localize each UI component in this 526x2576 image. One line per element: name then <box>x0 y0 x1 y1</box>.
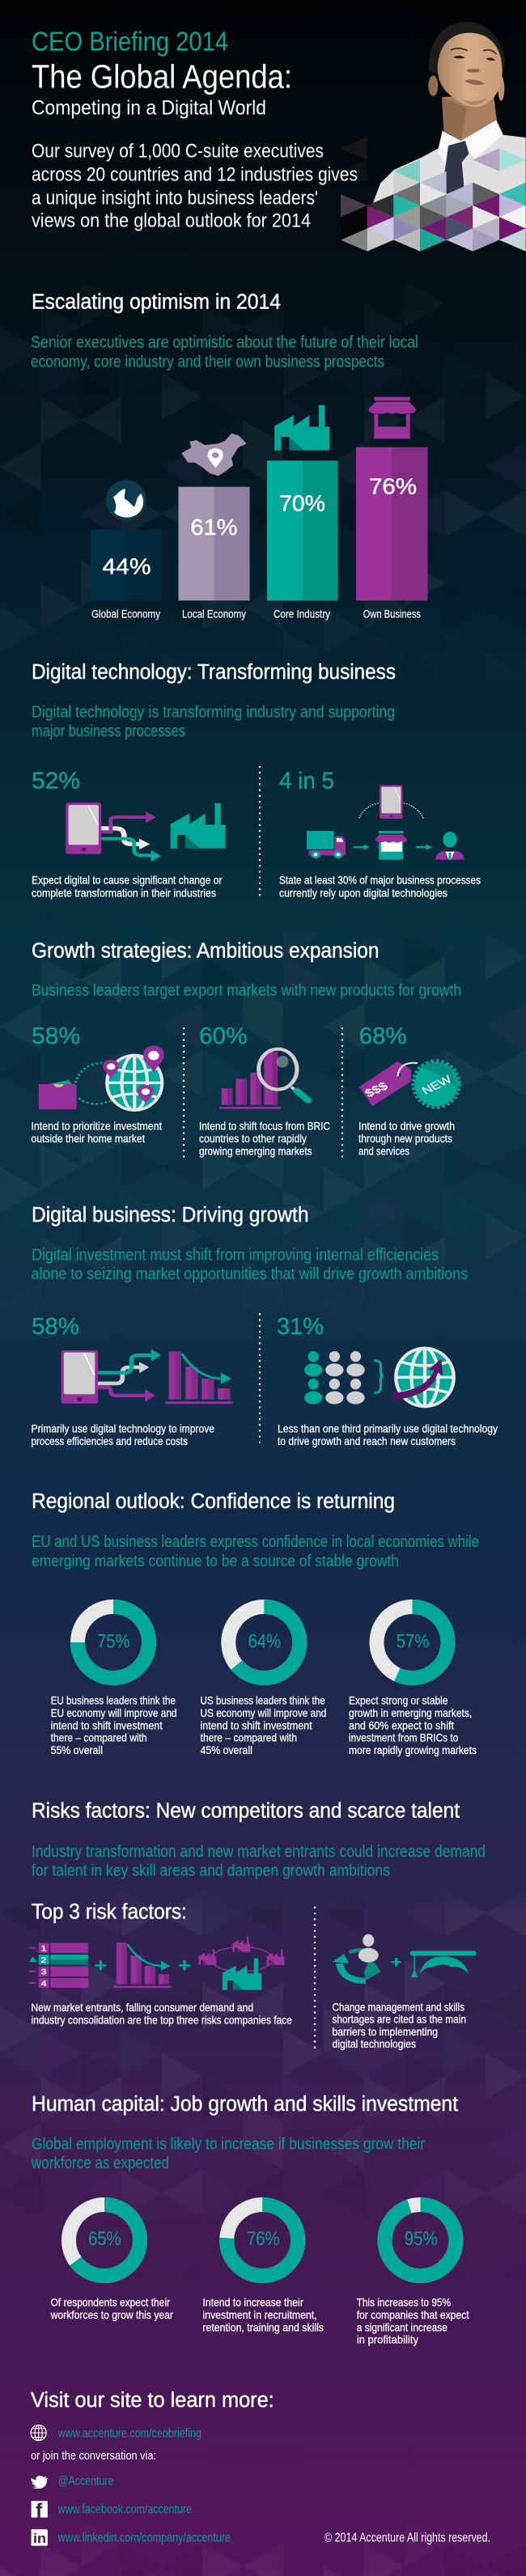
stat: 31%: 31% <box>277 1314 324 1340</box>
donut: 57%: 57% <box>397 1631 429 1653</box>
caption: barriers: Change management and skills <box>332 2001 464 2013</box>
caption: 95%: a significant increase <box>357 2321 448 2333</box>
icon: price tag and new badge: NEW <box>419 1073 456 1097</box>
bar: local economy 61% <box>178 487 249 600</box>
caption: 95%: for companies that expect <box>357 2309 469 2321</box>
caption: 58%: process efficiencies and reduce costs <box>31 1435 188 1447</box>
panel: footer links <box>31 2389 490 2546</box>
caption: 64%: intend to shift investment <box>201 1719 312 1731</box>
donut: 65%: 65% <box>88 2228 121 2250</box>
subheading <box>31 333 418 371</box>
caption: 75% <box>51 1695 176 1756</box>
caption: 57% <box>349 1695 477 1756</box>
caption: 4 in 5: currently rely upon digital technologies <box>279 887 448 899</box>
caption: barriers: digital technologies <box>332 2038 416 2050</box>
icon: ranking list: 1 <box>40 1944 46 1953</box>
intro paragraph: a unique insight into business leaders' <box>32 187 318 209</box>
panel: digital technology <box>32 661 481 899</box>
subheading: Global employment is likely to increase if businesses grow their <box>32 2136 425 2154</box>
subheading: Senior executives are optimistic about the future of their local <box>31 333 418 351</box>
mosaic triangles <box>341 137 526 252</box>
icon: phone, truck, shop and customer <box>307 785 464 860</box>
caption: 64%: there – compared with <box>201 1732 297 1744</box>
bar: global economy 44%: 44% <box>102 553 151 578</box>
caption: 4 in 5: State at least 30% of major business processes <box>279 875 481 887</box>
bar: local economy 61%: 61% <box>191 515 238 540</box>
hair <box>429 22 505 74</box>
bar icons <box>106 397 416 520</box>
donut: 75% <box>78 1607 149 1678</box>
subheading: workforce as expected <box>31 2154 169 2172</box>
icon: plus <box>392 1958 401 1967</box>
icon: price tag and new badge: $$$ <box>363 1080 391 1100</box>
caption: 76%: investment in recruitment, <box>202 2309 317 2321</box>
icon: phone with arrows to factory <box>66 803 226 862</box>
shirt <box>372 121 526 240</box>
icon: bar chart with magnifier <box>219 1049 308 1109</box>
caption: 64%: US business leaders think the <box>201 1695 325 1707</box>
caption: 76% <box>202 2297 324 2333</box>
icon: price tag and new badge <box>359 1061 460 1108</box>
heading: Human capital: Job growth and skills investment <box>32 2093 458 2116</box>
subtitle: Competing in a Digital World <box>32 97 266 120</box>
caption: 75%: intend to shift investment <box>51 1719 163 1731</box>
caption: 65%: workforces to grow this year <box>50 2309 173 2321</box>
icon: people and globe with rising arrow <box>304 1347 455 1408</box>
bar: own business 76% <box>356 447 427 600</box>
ears <box>428 75 438 96</box>
caption: 95%: This increases to 95% <box>357 2297 451 2309</box>
brows and eyes <box>451 49 496 54</box>
caption: top 3 risks: industry consolidation are the top three risks companies face <box>31 2015 292 2027</box>
heading: Digital technology: Transforming business <box>32 661 396 684</box>
icon: plus <box>95 1960 106 1970</box>
heading: Escalating optimism in 2014 <box>32 291 281 314</box>
icon: linkedin <box>32 2529 48 2546</box>
stat: 4 in 5: 4 in 5 <box>279 768 334 794</box>
caption: 31% <box>278 1423 498 1447</box>
title: The Global Agenda: The Global Agenda: <box>32 57 292 95</box>
subheading: emerging markets continue to be a source of stable growth <box>32 1553 399 1570</box>
panel: growth strategies <box>31 939 461 1159</box>
caption: top 3 risks <box>31 2002 292 2027</box>
donut: 57% <box>377 1607 448 1678</box>
caption: 64% <box>201 1695 326 1756</box>
icon: falling chart <box>113 1943 171 1988</box>
subheading: Business leaders target export markets with new products for growth <box>32 982 461 1000</box>
icon: twitter <box>32 2476 48 2489</box>
subheading <box>32 704 395 740</box>
caption: 68%: Intend to drive growth <box>358 1121 455 1133</box>
neck <box>442 95 497 141</box>
heading: Digital business: Driving growth <box>32 1204 309 1227</box>
icon: industry consolidation factories <box>198 1937 284 1990</box>
subheading: Digital investment must shift from improving internal efficiencies <box>32 1246 439 1264</box>
caption: 75%: EU business leaders think the <box>51 1695 176 1707</box>
donut: 65% <box>69 2205 140 2276</box>
caption: 76%: Intend to increase their <box>202 2297 303 2309</box>
caption: 31%: to drive growth and reach new customers <box>278 1435 456 1447</box>
caption: 65%: Of respondents expect their <box>51 2297 170 2309</box>
caption: 57%: growth in emerging markets, <box>349 1707 472 1719</box>
caption: 60%: countries to other rapidly <box>199 1133 307 1145</box>
text: join the conversation: or join the conversation via: <box>31 2449 156 2463</box>
bar: core industry 70%: 70% <box>279 491 325 516</box>
icon: globe <box>106 480 146 520</box>
link: website: www.accenture.com/ceobriefing <box>57 2427 201 2441</box>
caption: 60% <box>199 1121 330 1157</box>
icon: ranking list: 2 <box>40 1956 46 1965</box>
bar: core industry 70% <box>267 460 338 600</box>
icon: change management person <box>332 1934 381 1981</box>
title: CEO Briefing 2014: CEO Briefing 2014 <box>32 27 228 57</box>
bar labels <box>91 607 421 620</box>
donut: 64%: 64% <box>248 1631 281 1653</box>
subheading <box>32 1843 486 1879</box>
caption: 95%: in profitability <box>357 2334 418 2346</box>
subheading <box>31 2136 425 2172</box>
intro paragraph: across 20 countries and 12 industries gives <box>32 163 358 185</box>
icon: ranking list <box>29 1943 88 1989</box>
caption: 52%: Expect digital to cause significant change or <box>32 875 223 887</box>
icon: plus <box>179 1960 190 1970</box>
bar labels: Own Business <box>363 607 421 620</box>
hero portrait with triangle mosaic <box>341 22 526 252</box>
donut: 95% <box>385 2205 456 2276</box>
caption: 65% <box>50 2297 173 2321</box>
subheading: Digital technology is transforming industry and supporting <box>32 704 395 722</box>
panel: escalating optimism <box>31 291 427 620</box>
caption: 58%: Primarily use digital technology to improve <box>31 1423 214 1435</box>
icon: web globe <box>31 2425 46 2441</box>
caption: 68%: through new products <box>358 1133 452 1145</box>
icon: ranking list: 3 <box>40 1968 46 1976</box>
caption: 52%: complete transformation in their industries <box>32 887 216 899</box>
donut: 64% <box>228 1607 299 1678</box>
caption: 76%: retention, training and skills <box>202 2321 324 2333</box>
caption: 60%: Intend to shift focus from BRIC <box>199 1121 330 1133</box>
header title block <box>32 27 358 232</box>
heading: Visit our site to learn more: <box>31 2389 274 2412</box>
link: facebook: www.facebook.com/accenture <box>57 2503 192 2517</box>
caption: barriers: barriers to implementing <box>332 2026 438 2038</box>
caption: 58%: Intend to prioritize investment <box>31 1121 162 1133</box>
heading: Regional outlook: Confidence is returning <box>32 1490 395 1513</box>
face <box>438 33 503 107</box>
donut: 95%: 95% <box>405 2228 438 2250</box>
link: linkedin: www.linkedin.com/company/accenture <box>57 2532 231 2545</box>
stat: 58%: 58% <box>32 1023 80 1049</box>
tie <box>439 141 469 194</box>
icon: phone with arrows to falling chart <box>61 1349 232 1404</box>
caption: 58%: outside their home market <box>31 1133 145 1145</box>
caption: 75%: EU economy will improve and <box>51 1707 176 1719</box>
caption: 60%: growing emerging markets <box>199 1145 312 1157</box>
icon letter: f: f <box>36 2500 43 2523</box>
icon letters: in: in <box>33 2531 46 2546</box>
caption: barriers <box>332 2001 466 2050</box>
caption: 31%: Less than one third primarily use digital technology <box>278 1423 498 1435</box>
subheading: major business processes <box>32 722 185 740</box>
caption: 57%: more rapidly growing markets <box>349 1744 477 1756</box>
bar labels: Core Industry <box>274 607 330 620</box>
stat: 68%: 68% <box>359 1023 407 1049</box>
donut: 75%: 75% <box>97 1631 130 1653</box>
bar labels: Global Economy <box>91 607 160 620</box>
caption: top 3 risks: New market entrants, falling consumer demand and <box>31 2002 253 2014</box>
bar labels: Local Economy <box>182 607 246 620</box>
caption: 95% <box>357 2297 469 2346</box>
caption: 64%: US economy will improve and <box>201 1707 326 1719</box>
caption: 57%: investment from BRICs to <box>349 1732 458 1744</box>
caption: 52% <box>32 875 223 899</box>
intro paragraph <box>32 140 358 232</box>
caption: barriers: shortages are cited as the main <box>332 2014 466 2026</box>
bar: own business 76%: 76% <box>369 474 417 499</box>
link: twitter: @Accenture <box>58 2475 114 2489</box>
caption: 75%: 55% overall <box>51 1744 103 1756</box>
caption: 57%: Expect strong or stable <box>349 1695 448 1707</box>
nose and mouth <box>467 69 480 73</box>
stat: 60%: 60% <box>199 1023 248 1049</box>
stat: 52%: 52% <box>32 768 80 794</box>
caption: 4 in 5 <box>279 875 481 899</box>
subheading: alone to seizing market opportunities that will drive growth ambitions <box>31 1265 468 1283</box>
donut: 76% <box>227 2205 298 2276</box>
intro paragraph: views on the global outlook for 2014 <box>32 210 311 232</box>
intro paragraph: Our survey of 1,000 C-suite executives <box>32 140 324 162</box>
bar chart <box>91 447 427 620</box>
subheading: top 3 risk factors: Top 3 risk factors: <box>32 1900 187 1924</box>
caption: 58% <box>31 1121 162 1145</box>
caption: 64%: 45% overall <box>201 1744 252 1756</box>
donut: 76%: 76% <box>247 2228 280 2250</box>
panel: regional outlook <box>32 1490 479 1756</box>
icon: wallet and globe with pins <box>39 1046 164 1111</box>
subheading: economy, core industry and their own business prospects <box>31 353 384 371</box>
caption: 68% <box>358 1121 455 1157</box>
icon: graduation cap <box>410 1951 477 1977</box>
icon: facebook <box>32 2501 48 2518</box>
panel: human capital <box>31 2093 469 2346</box>
caption: 75%: there – compared with <box>51 1732 147 1744</box>
bar: global economy 44% <box>91 529 162 600</box>
caption: 68%: and services <box>358 1145 409 1157</box>
subheading: for talent in key skill areas and dampen growth ambitions <box>32 1862 390 1879</box>
copyright: © 2014 Accenture All rights reserved. <box>325 2532 490 2545</box>
icon: shop <box>368 397 416 439</box>
icon: china map with pin <box>181 434 247 476</box>
icon: ranking list: 4 <box>40 1980 47 1989</box>
caption: 58% <box>31 1423 214 1447</box>
heading: Growth strategies: Ambitious expansion <box>32 939 379 962</box>
panel: digital business <box>31 1204 498 1447</box>
subheading <box>31 1246 468 1283</box>
heading: Risks factors: New competitors and scarce talent <box>32 1800 460 1823</box>
caption: 57%: and 60% expect to shift <box>349 1719 454 1731</box>
panel: risk factors <box>29 1800 486 2050</box>
icon: factory <box>274 405 329 451</box>
stat: 58%: 58% <box>32 1314 79 1340</box>
subheading <box>32 1533 479 1570</box>
